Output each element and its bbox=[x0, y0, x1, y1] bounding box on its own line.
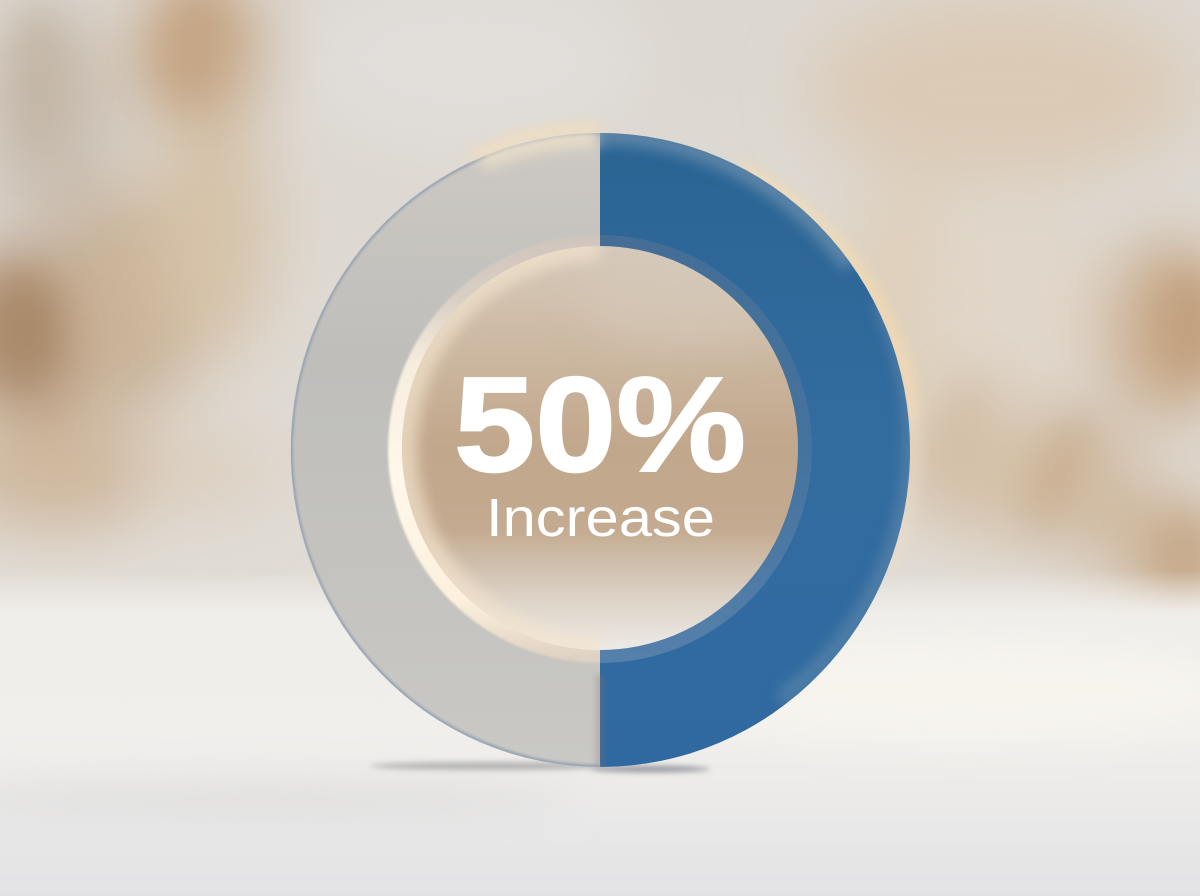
label: Increase: Increase bbox=[486, 488, 715, 548]
ring segment: filled blue half bbox=[600, 133, 910, 767]
inner rim: blue right side bbox=[600, 235, 812, 663]
inner rim: glowing left side bbox=[387, 236, 600, 664]
ring segment: remaining grey half bbox=[290, 133, 600, 767]
floor bbox=[0, 570, 1200, 896]
value: 50%: 50% bbox=[454, 349, 746, 500]
centre opening bbox=[402, 246, 798, 650]
warm halo behind ring bbox=[470, 129, 914, 570]
soft glow inside the opening bbox=[402, 246, 800, 650]
ring edge shading bbox=[290, 133, 912, 767]
donut chart: 50 percent bbox=[290, 133, 912, 767]
